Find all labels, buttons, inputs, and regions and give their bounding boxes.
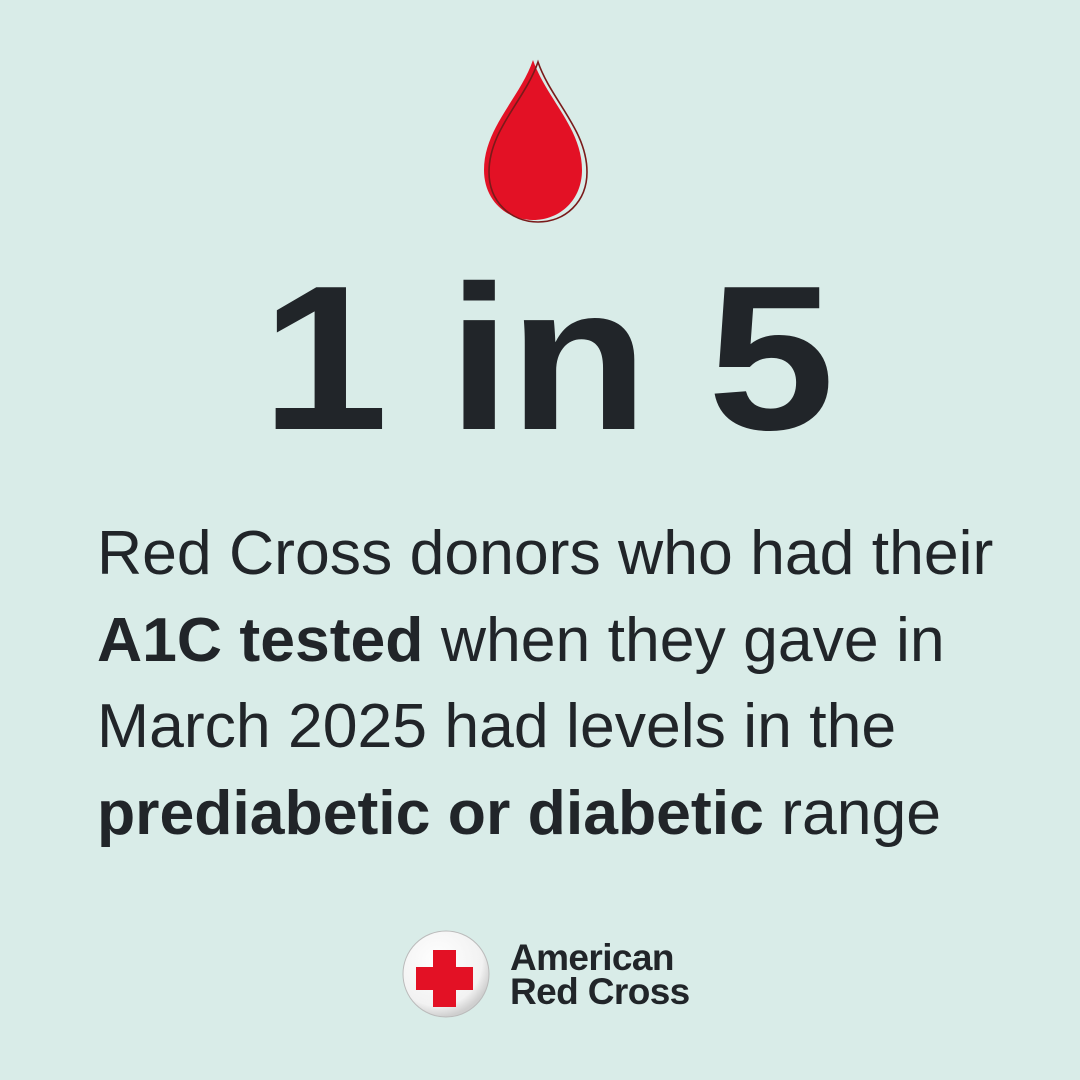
icon: blood drop bbox=[484, 60, 588, 223]
logo text: Red Cross bbox=[510, 971, 690, 1012]
text block: description: March 2025 had levels in the bbox=[97, 691, 896, 761]
text block: description: prediabetic or diabetic range bbox=[97, 778, 941, 848]
text block: description: A1C tested when they gave in bbox=[97, 604, 945, 674]
logo text bbox=[510, 937, 690, 1012]
text block: description: Red Cross donors who had their bbox=[97, 518, 993, 588]
icon: red cross button bbox=[402, 930, 490, 1018]
logo text: American bbox=[510, 937, 674, 978]
headline: 1 in 5: 1 in 5 bbox=[261, 243, 833, 473]
text block: description bbox=[97, 518, 993, 848]
logo: American Red Cross bbox=[402, 930, 690, 1018]
